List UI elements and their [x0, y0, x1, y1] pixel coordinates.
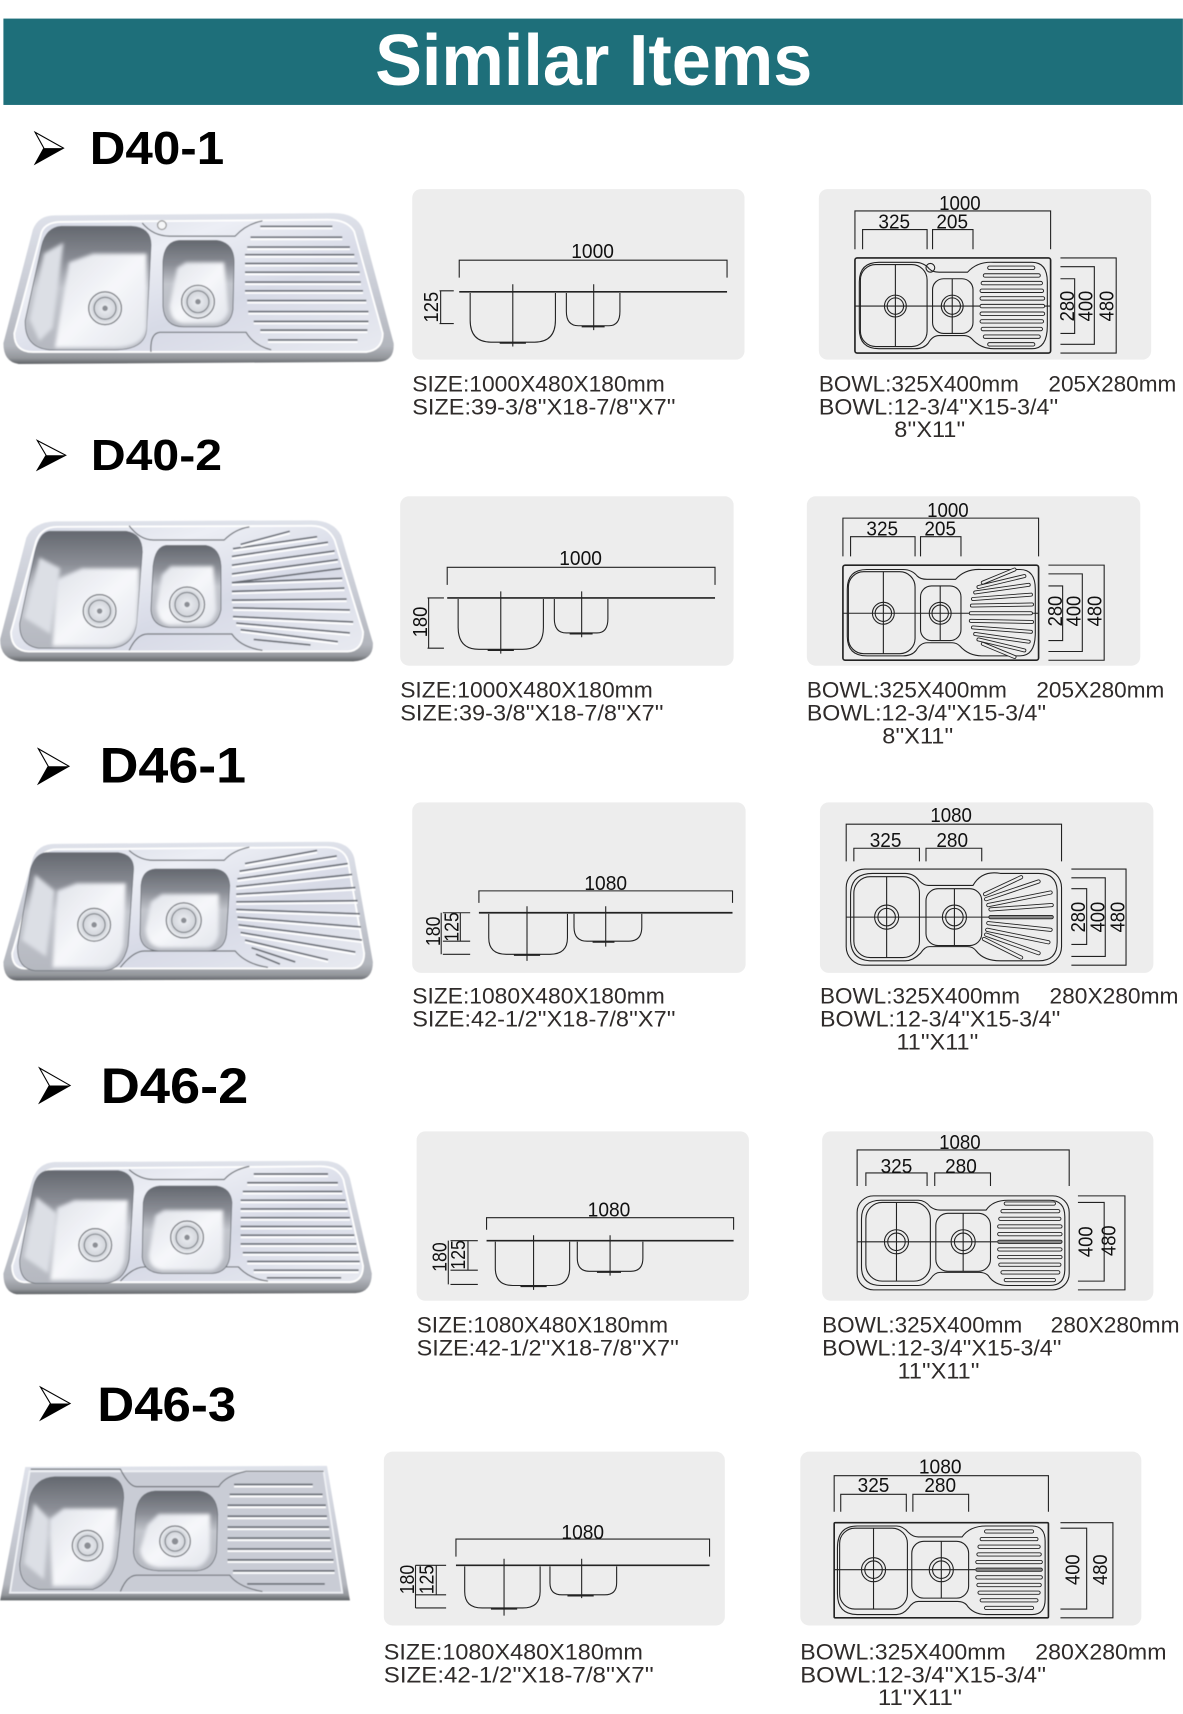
panel: plan drawing D40-1: 480	[1095, 291, 1118, 321]
panel: plan drawing D40-2: 280	[1044, 596, 1067, 626]
section: D40-1	[3, 122, 1176, 442]
size text D40-2	[400, 677, 664, 725]
size text D40-1: SIZE:1000X480X180mm	[412, 371, 665, 396]
bowl text D46-3: BOWL:325X400mm	[800, 1639, 1006, 1664]
panel: side drawing D46-3: 1080	[561, 1521, 604, 1544]
panel: plan drawing D46-2: 1080	[939, 1131, 981, 1154]
panel: plan drawing D46-3: 325	[858, 1474, 889, 1497]
bowl text D46-1: BOWL:12-3/4''X15-3/4''	[820, 1006, 1060, 1031]
panel: plan drawing D40-2: 325	[866, 518, 898, 541]
panel: side drawing D40-2: 180	[409, 607, 432, 637]
panel: plan drawing D40-2: 1000	[927, 499, 969, 522]
bowl text D40-2	[807, 677, 1164, 748]
panel: plan drawing D40-2: 400	[1063, 596, 1086, 626]
size text D46-3: SIZE:1080X480X180mm	[384, 1639, 643, 1664]
panel: plan drawing D46-3: 480	[1089, 1554, 1112, 1585]
panel: plan drawing D40-2: 205	[924, 518, 956, 541]
panel: plan drawing D40-1: 280	[1056, 291, 1079, 321]
panel: plan drawing D40-2	[807, 496, 1140, 666]
bowl text D46-1: BOWL:325X400mm	[820, 983, 1020, 1008]
heading: D46-3: D46-3	[97, 1378, 236, 1432]
panel: side drawing D46-1: 1080	[584, 872, 627, 895]
photo: sink D46-3	[0, 1466, 350, 1600]
heading: D46-3	[41, 1378, 236, 1432]
panel: plan drawing D40-1: 205	[936, 210, 968, 233]
panel: plan drawing D46-1	[820, 802, 1153, 973]
panel: plan drawing D46-3: 1080	[919, 1456, 962, 1479]
heading: D46-2: D46-2	[101, 1057, 248, 1114]
bowl text D46-2: BOWL:12-3/4''X15-3/4''	[822, 1335, 1062, 1360]
heading: D40-1: D40-1	[90, 122, 224, 174]
panel: plan drawing D46-1: 325	[870, 829, 901, 852]
panel: plan drawing D46-2: 400	[1075, 1226, 1098, 1257]
bowl text D40-1: BOWL:12-3/4''X15-3/4''	[819, 394, 1058, 419]
size text D40-2: SIZE:39-3/8''X18-7/8''X7''	[400, 700, 664, 725]
title banner	[3, 19, 1183, 105]
panel: plan drawing D46-2: 280	[945, 1155, 977, 1178]
panel: side drawing D40-1	[412, 189, 745, 360]
panel: plan drawing D46-2: 325	[881, 1155, 912, 1178]
panel: plan drawing D40-1	[819, 189, 1151, 360]
bowl text D40-1: 8''X11''	[894, 417, 965, 442]
section: D40-2	[0, 431, 1164, 748]
panel: plan drawing D40-1: 1000	[939, 192, 981, 215]
bowl text D46-3	[800, 1639, 1166, 1710]
panel: side drawing D40-1: 125	[420, 292, 443, 322]
size text D46-1	[412, 983, 676, 1031]
heading: D40-2	[37, 431, 222, 480]
size text D46-3: SIZE:42-1/2''X18-7/8''X7''	[384, 1662, 654, 1687]
bowl text D46-1: 280X280mm	[1050, 983, 1179, 1008]
size text D46-1: SIZE:1080X480X180mm	[412, 983, 665, 1008]
heading: D46-1: D46-1	[100, 737, 246, 794]
bowl text D46-2: BOWL:325X400mm	[822, 1313, 1022, 1338]
bowl text D46-1: 11''X11''	[896, 1029, 978, 1054]
photo: sink D46-2	[3, 1161, 372, 1294]
heading: D46-1	[38, 737, 246, 794]
panel: side drawing D40-2: 1000	[559, 547, 602, 570]
bowl text D40-1: 205X280mm	[1048, 371, 1176, 396]
bowl text D46-3: BOWL:12-3/4''X15-3/4''	[800, 1662, 1046, 1687]
panel: side drawing D46-3: 180	[396, 1565, 419, 1594]
size text D46-2	[417, 1313, 679, 1360]
bowl text D46-3: 11''X11''	[878, 1685, 962, 1710]
panel: plan drawing D46-2	[822, 1131, 1153, 1301]
panel: plan drawing D40-1: 400	[1075, 291, 1098, 321]
panel: side drawing D46-1	[412, 802, 746, 973]
size text D40-1: SIZE:39-3/8''X18-7/8''X7''	[412, 394, 676, 419]
section: D46-2	[3, 1057, 1180, 1383]
size text D46-3	[384, 1639, 654, 1687]
panel: side drawing D46-2: 180	[429, 1242, 452, 1272]
size text D40-1	[412, 371, 676, 419]
panel: plan drawing D46-2: 480	[1098, 1225, 1121, 1256]
panel: side drawing D46-3: 125	[416, 1565, 439, 1594]
bowl text D40-1: BOWL:325X400mm	[819, 371, 1019, 396]
panel: plan drawing D46-1: 400	[1087, 902, 1110, 932]
bowl text D40-1	[819, 371, 1176, 442]
panel: plan drawing D46-1: 280	[936, 829, 968, 852]
heading: D40-1	[35, 122, 224, 174]
panel: side drawing D46-1: 125	[441, 912, 464, 942]
bowl text D46-2: 11''X11''	[898, 1358, 980, 1383]
heading: D40-2: D40-2	[91, 431, 222, 480]
panel: side drawing D46-2	[417, 1131, 749, 1301]
panel: side drawing D46-2: 1080	[588, 1199, 630, 1222]
bowl text D46-3: 280X280mm	[1035, 1639, 1166, 1664]
bowl text D40-2: BOWL:12-3/4''X15-3/4''	[807, 700, 1046, 725]
section: D46-3	[0, 1378, 1166, 1710]
panel: plan drawing D40-1: 325	[878, 210, 910, 233]
bowl text D40-2: 8''X11''	[882, 723, 953, 748]
panel: side drawing D40-1: 1000	[571, 240, 614, 263]
bowl text D46-2	[822, 1313, 1180, 1383]
panel: side drawing D46-3	[384, 1452, 725, 1625]
bowl text D46-1	[820, 983, 1179, 1054]
size text D46-1: SIZE:42-1/2''X18-7/8''X7''	[412, 1006, 676, 1031]
panel: plan drawing D46-1: 280	[1067, 902, 1090, 932]
panel: plan drawing D46-3: 400	[1062, 1554, 1085, 1585]
photo: sink D46-1	[3, 842, 373, 981]
panel: plan drawing D46-1: 480	[1106, 902, 1129, 932]
panel: plan drawing D46-3	[800, 1452, 1141, 1625]
size text D46-2: SIZE:1080X480X180mm	[417, 1313, 668, 1338]
panel: side drawing D46-1: 180	[422, 917, 445, 946]
bowl text D46-2: 280X280mm	[1051, 1313, 1180, 1338]
panel: plan drawing D40-2: 480	[1083, 596, 1106, 626]
panel: plan drawing D46-3: 280	[924, 1474, 956, 1497]
photo: sink D40-1	[3, 213, 394, 364]
bowl text D40-2: 205X280mm	[1036, 677, 1164, 702]
size text D40-2: SIZE:1000X480X180mm	[400, 677, 653, 702]
section: D46-1	[3, 737, 1179, 1054]
panel: plan drawing D46-1: 1080	[930, 804, 972, 827]
panel: side drawing D46-2: 125	[447, 1240, 470, 1270]
title text: Similar Items	[375, 21, 812, 101]
heading: D46-2	[39, 1057, 248, 1114]
bowl text D40-2: BOWL:325X400mm	[807, 677, 1007, 702]
photo: sink D40-2	[0, 520, 373, 661]
size text D46-2: SIZE:42-1/2''X18-7/8''X7''	[417, 1335, 679, 1360]
panel: side drawing D40-2	[400, 496, 734, 666]
